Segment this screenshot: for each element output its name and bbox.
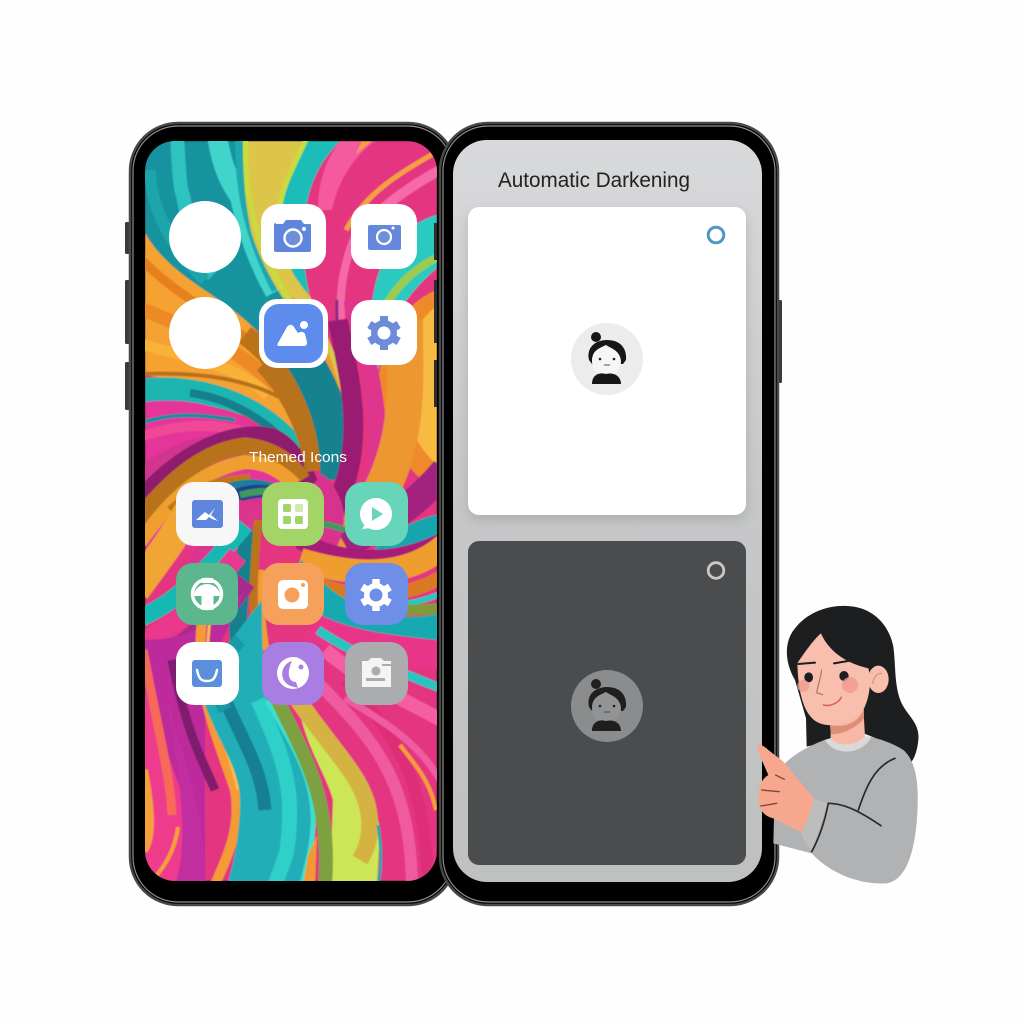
finger lines (761, 775, 784, 806)
right phone body (440, 123, 778, 905)
icon: settings gear (351, 300, 417, 365)
themed icon: orange camera (262, 563, 324, 625)
themed icon: dome (176, 563, 238, 625)
swirl right (268, 360, 320, 470)
empty white circle top (169, 201, 241, 273)
face (797, 633, 870, 725)
left phone (125, 123, 456, 905)
icon: square camera (351, 204, 417, 269)
light mode avatar (571, 323, 643, 395)
label: Themed Icons: Themed Icons (249, 450, 347, 466)
hair (787, 606, 918, 762)
right phone side button (777, 300, 782, 383)
icon: camera (261, 204, 326, 269)
panel: dark mode (468, 541, 746, 865)
ear (868, 666, 889, 693)
character pointing at phone (757, 606, 918, 883)
themed icon: grid (262, 482, 324, 546)
teal left (145, 141, 284, 334)
panel: light mode (468, 207, 746, 515)
neck (831, 707, 865, 745)
dark mode radio (708, 563, 724, 578)
left phone side buttons (125, 222, 130, 410)
heading: Automatic Darkening: Automatic Darkening (498, 169, 690, 192)
empty white circle bottom (169, 297, 241, 369)
neck shadow (830, 709, 864, 734)
collar (825, 736, 871, 752)
dark mode avatar (571, 670, 643, 742)
left phone body (130, 123, 456, 905)
upper right (378, 290, 434, 478)
hand pointing (757, 745, 814, 832)
sleeve lines (812, 758, 895, 852)
themed icon: gray id camera (345, 642, 408, 705)
left phone right-edge buttons (434, 223, 437, 407)
orange left (145, 232, 294, 430)
themed icon: play chat (345, 482, 408, 546)
right phone (440, 123, 782, 905)
swirl left (190, 500, 240, 620)
light mode radio (708, 227, 724, 243)
themed icon: basket (176, 642, 239, 705)
centre swirl (145, 401, 300, 560)
cuff (801, 798, 827, 852)
themed icon: blue gear (345, 563, 408, 625)
themed icon: landscape (176, 482, 239, 546)
wallpaper (135, 135, 445, 885)
sweater (773, 737, 918, 883)
themed icon: moon (262, 642, 324, 705)
lower bands (145, 592, 244, 868)
right phone screen (453, 140, 762, 882)
facial features (797, 661, 882, 705)
icon: gallery highlighted (259, 299, 328, 368)
white card shadow (468, 212, 746, 520)
